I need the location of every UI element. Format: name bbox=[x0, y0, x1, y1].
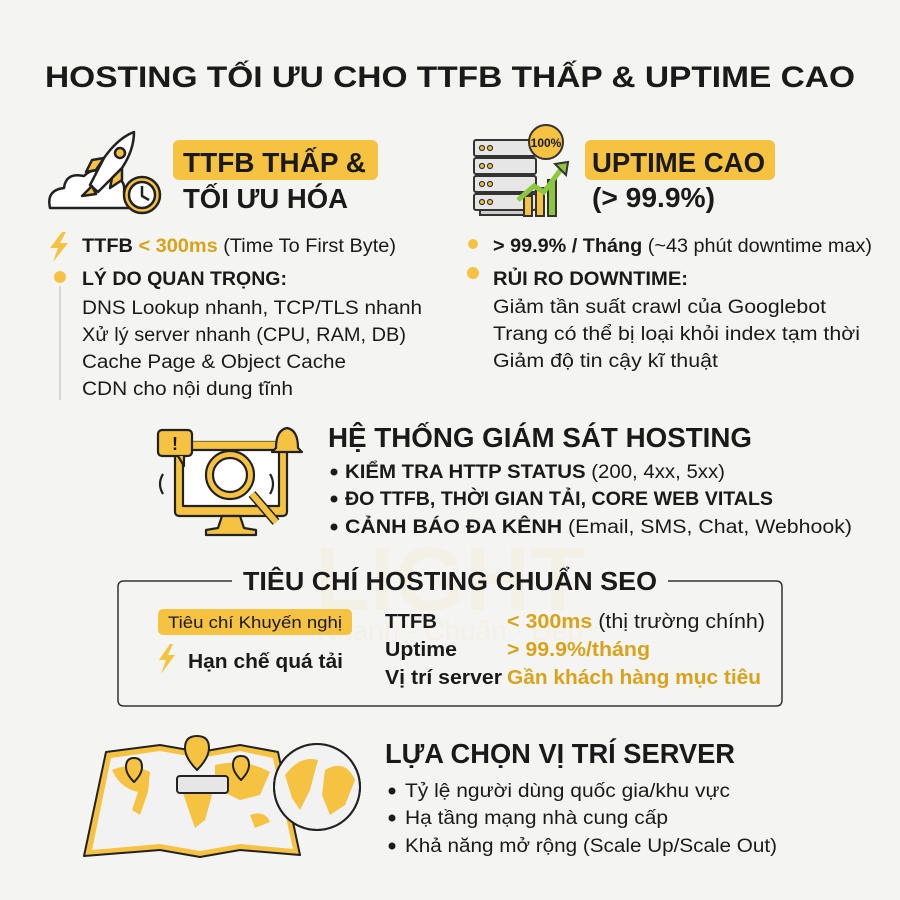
panel: SEO criteria: Tiêu chí Khuyến nghị bbox=[168, 613, 342, 632]
panel: monitoring bbox=[158, 421, 852, 538]
tag: recommended bbox=[158, 609, 352, 635]
list: location factors: Tỷ lệ người dùng quốc gia/khu vực bbox=[405, 781, 730, 802]
panel: TTFB: TỐI ƯU HÓA bbox=[183, 182, 348, 214]
table rows bbox=[385, 611, 765, 689]
heading: UPTIME CAO bbox=[585, 140, 775, 180]
watermark: Nhanh - Chuẩn - Đẹp bbox=[317, 615, 583, 646]
text: reasons bbox=[82, 268, 422, 400]
table rows: < 300ms (thị trường chính) bbox=[507, 611, 765, 633]
title: HOSTING TỐI ƯU CHO TTFB THẤP & UPTIME CAO bbox=[45, 60, 855, 94]
text: reasons: Xử lý server nhanh (CPU, RAM, DB) bbox=[82, 325, 406, 346]
table rows: Uptime bbox=[385, 639, 457, 661]
heading: criteria: TIÊU CHÍ HOSTING CHUẨN SEO bbox=[243, 566, 657, 596]
list: monitoring: KIỂM TRA HTTP STATUS (200, 4xx, 5xx) bbox=[345, 461, 725, 483]
text: downtime risks: Trang có thể bị loại khỏi index tạm thời bbox=[493, 324, 860, 345]
panel: TTFB bbox=[49, 132, 422, 400]
table rows: Gần khách hàng mục tiêu bbox=[507, 667, 761, 689]
heading: monitoring: HỆ THỐNG GIÁM SÁT HOSTING bbox=[328, 421, 752, 453]
list: location factors bbox=[388, 781, 777, 857]
list: monitoring: CẢNH BÁO ĐA KÊNH (Email, SMS, Chat, Webhook) bbox=[345, 516, 852, 538]
panel: server location bbox=[84, 736, 777, 857]
text: reasons: LÝ DO QUAN TRỌNG: bbox=[82, 268, 287, 290]
list: monitoring: ĐO TTFB, THỜI GIAN TẢI, CORE WEB VITALS bbox=[345, 488, 773, 510]
heading: server location: LỰA CHỌN VỊ TRÍ SERVER bbox=[385, 738, 735, 769]
text: downtime risks: RỦI RO DOWNTIME: bbox=[493, 268, 688, 290]
panel: uptime: (> 99.9%) bbox=[592, 182, 715, 213]
text: reasons: Cache Page & Object Cache bbox=[82, 352, 346, 373]
icon: monitor bbox=[158, 428, 302, 535]
text: reasons: DNS Lookup nhanh, TCP/TLS nhanh bbox=[82, 298, 422, 319]
heading: TTFB THẤP bbox=[173, 140, 378, 180]
text: TTFB metric: TTFB < 300ms (Time To First Byte) bbox=[82, 236, 396, 257]
table rows: > 99.9%/tháng bbox=[507, 639, 650, 661]
panel: uptime: 100% bbox=[531, 136, 562, 150]
icon: lightning bbox=[50, 232, 68, 262]
icon: map and globe bbox=[84, 736, 360, 857]
list: monitoring bbox=[330, 461, 852, 538]
table rows: Vị trí server bbox=[385, 667, 502, 689]
text: reasons: CDN cho nội dung tĩnh bbox=[82, 379, 293, 400]
text: uptime metric: > 99.9% / Tháng (~43 phút downtime max) bbox=[493, 236, 872, 257]
table rows: TTFB bbox=[385, 611, 437, 633]
panel: SEO criteria: Hạn chế quá tải bbox=[188, 651, 343, 673]
panel: uptime bbox=[467, 125, 872, 372]
panel: uptime: UPTIME CAO bbox=[592, 147, 765, 178]
text: downtime risks: Giảm tần suất crawl của Googlebot bbox=[493, 297, 827, 318]
icon: server with chart bbox=[474, 125, 568, 216]
text: downtime risks bbox=[493, 268, 860, 372]
watermark: LIGHT bbox=[315, 530, 585, 630]
icon: lightning bbox=[159, 644, 175, 674]
icon: rocket cloud clock bbox=[49, 132, 160, 213]
panel: monitoring: ! bbox=[172, 434, 178, 454]
list: location factors: Khả năng mở rộng (Scale Up/Scale Out) bbox=[405, 836, 777, 857]
panel: TTFB: TTFB THẤP & bbox=[183, 147, 366, 178]
text: downtime risks: Giảm độ tin cậy kĩ thuật bbox=[493, 351, 719, 372]
panel: SEO criteria bbox=[118, 566, 782, 706]
list: location factors: Hạ tầng mạng nhà cung cấp bbox=[405, 808, 668, 829]
